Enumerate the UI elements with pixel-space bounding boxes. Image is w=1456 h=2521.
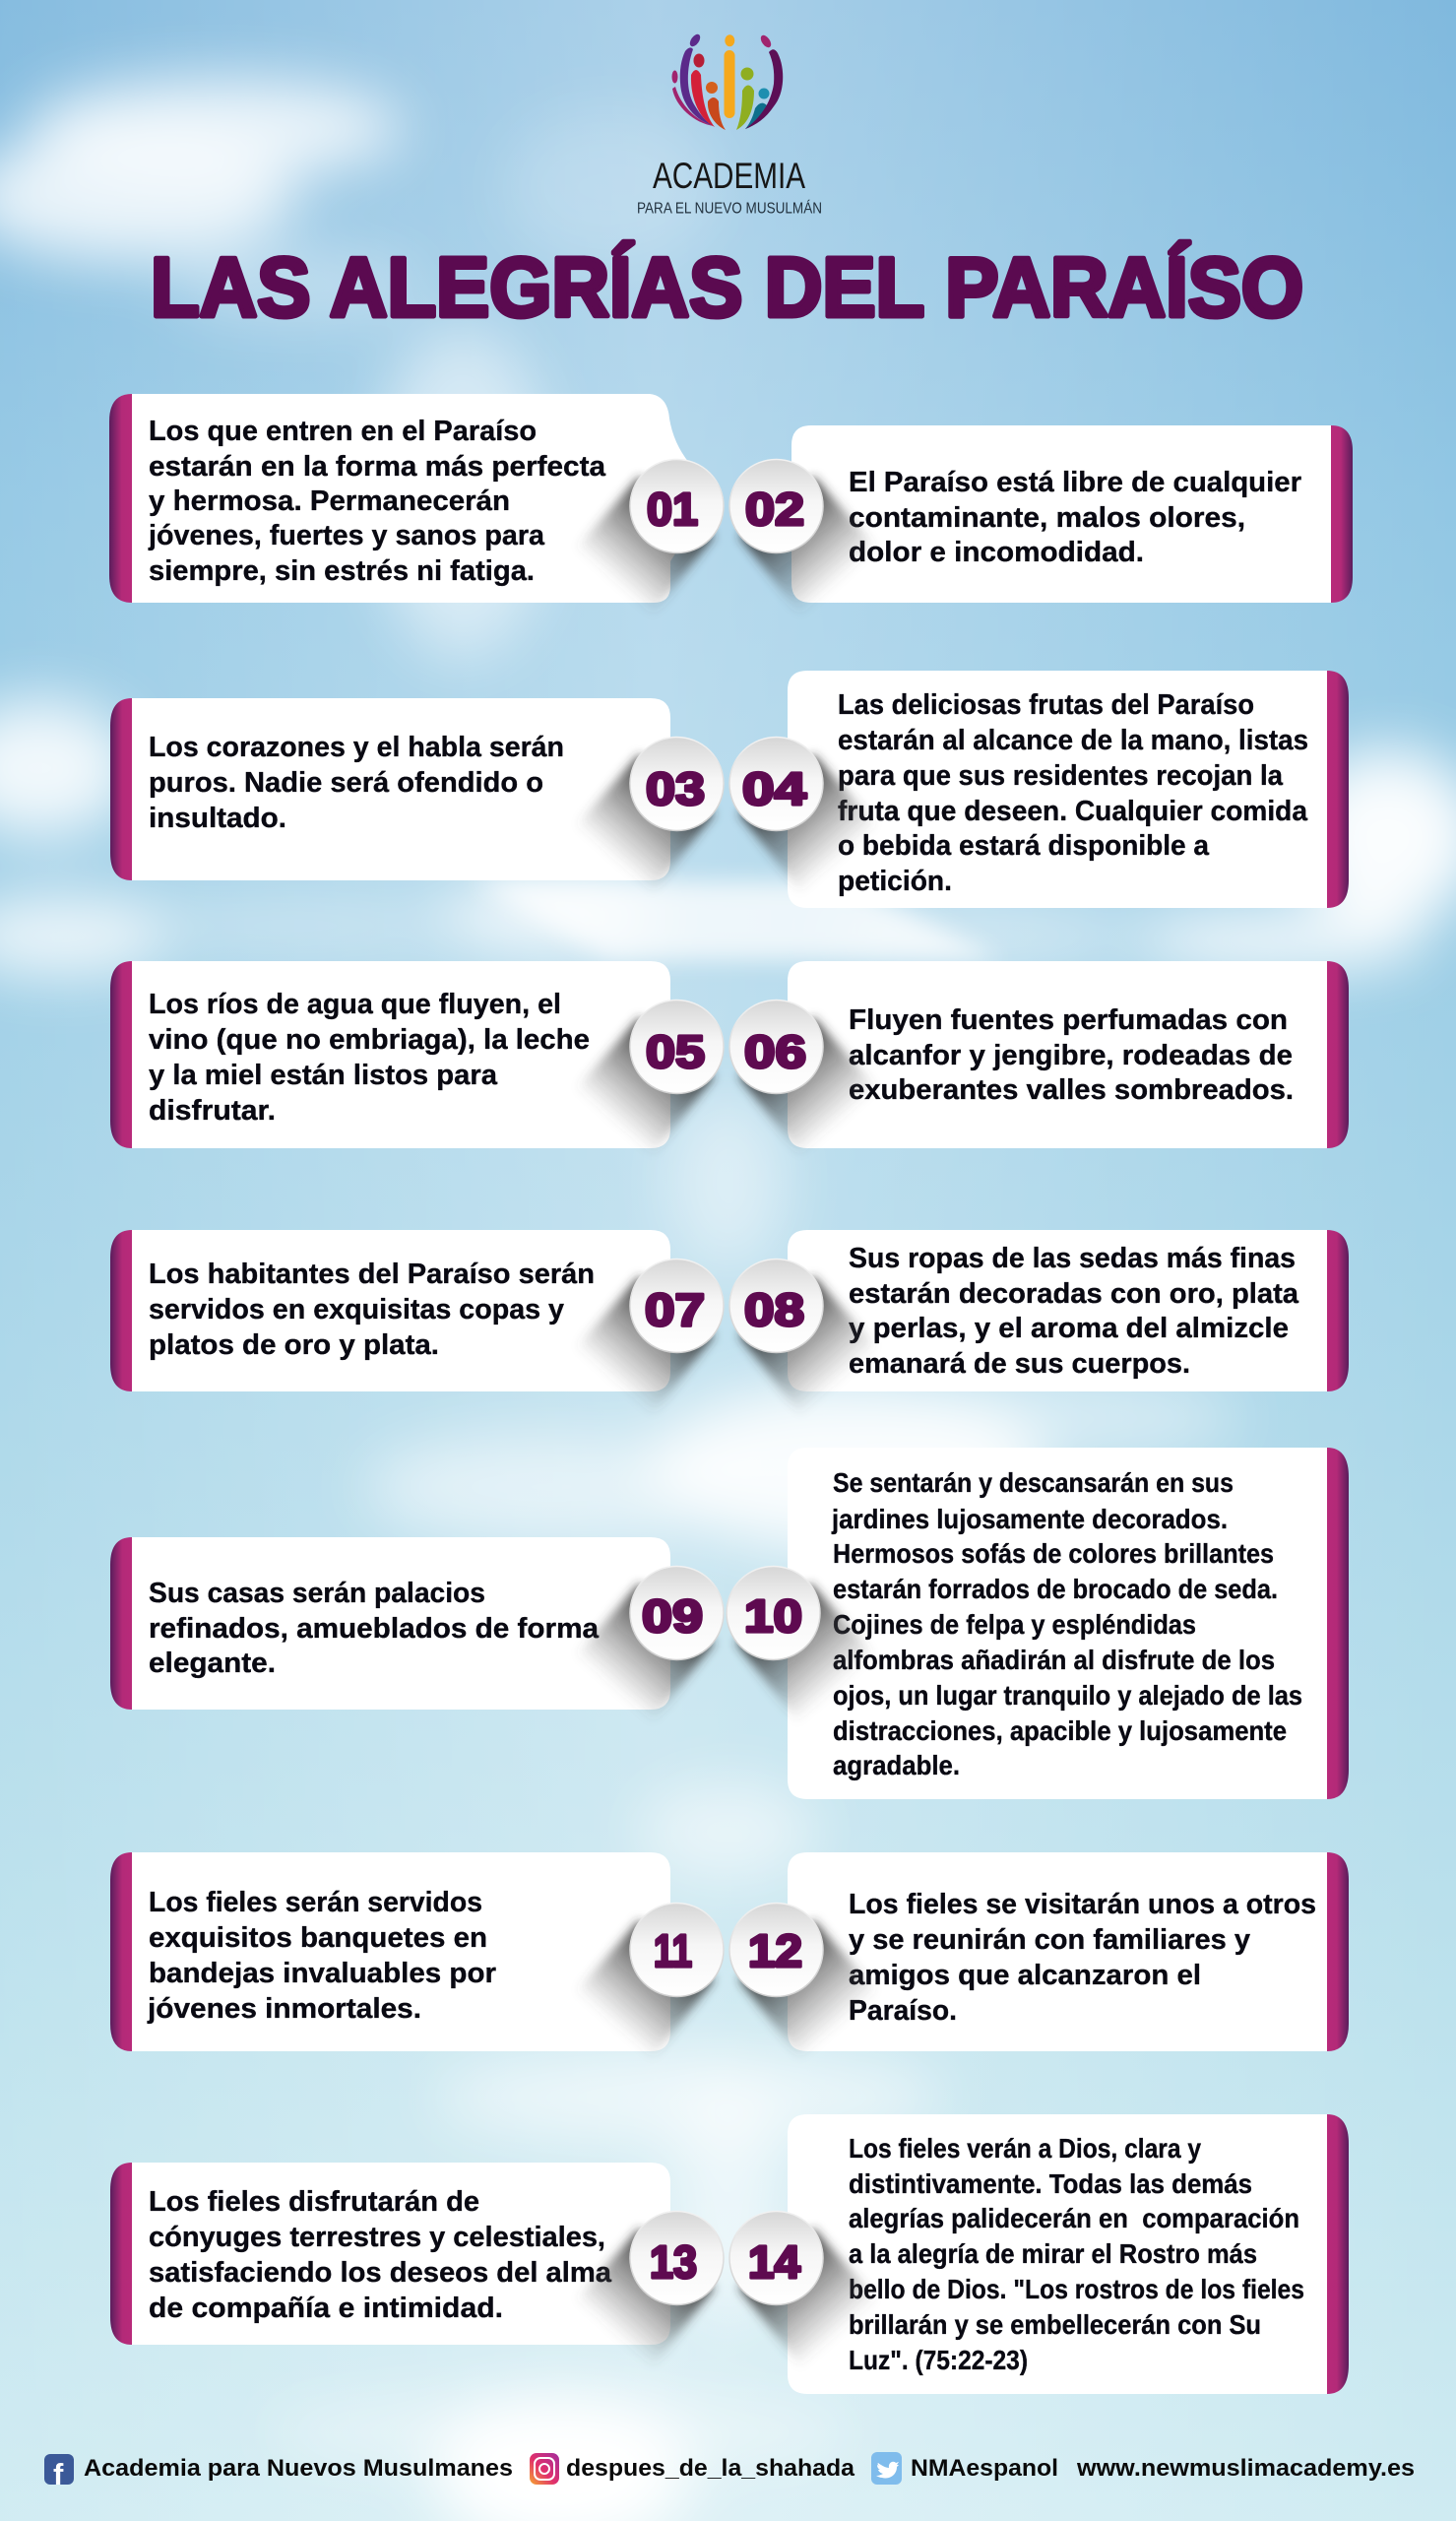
text 10: ojos, un lugar tranquilo y alejado de las bbox=[833, 1680, 1302, 1711]
text 07: Los habitantes del Paraíso serán bbox=[149, 1259, 595, 1290]
text 14: Luz". (75:22-23) bbox=[849, 2345, 1028, 2375]
badge 13 bbox=[575, 2212, 724, 2368]
text 04: Las deliciosas frutas del Paraíso bbox=[838, 689, 1254, 721]
text 08: Sus ropas de las sedas más finas bbox=[849, 1243, 1296, 1274]
text 14: Los fieles verán a Dios, clara y bbox=[849, 2133, 1201, 2164]
text 07 bbox=[149, 1259, 595, 1361]
text 07: platos de oro y plata. bbox=[149, 1329, 439, 1361]
text 10: Cojines de felpa y espléndidas bbox=[833, 1609, 1196, 1640]
badge 10 bbox=[727, 1566, 876, 1723]
logo icon: figures in a circle bbox=[671, 32, 783, 130]
text 13 bbox=[149, 2186, 612, 2324]
icon: facebook: f bbox=[53, 2457, 64, 2491]
text 10: agradable. bbox=[833, 1750, 960, 1780]
panel: card 05 bbox=[110, 961, 670, 1148]
panel: card 03 bbox=[110, 698, 670, 880]
text 06: Fluyen fuentes perfumadas con bbox=[849, 1004, 1288, 1036]
badge 14: 14 bbox=[748, 2236, 800, 2288]
text 01: y hermosa. Permanecerán bbox=[149, 485, 510, 517]
text 11: bandejas invaluables por bbox=[149, 1958, 496, 1989]
badge 06: 06 bbox=[744, 1026, 806, 1077]
badge 05: 05 bbox=[646, 1026, 705, 1077]
text 05: vino (que no embriaga), la leche bbox=[149, 1024, 590, 1056]
text 10: distracciones, apacible y lujosamente bbox=[833, 1715, 1287, 1746]
text 09: refinados, amueblados de forma bbox=[149, 1613, 600, 1645]
text 01: siempre, sin estrés ni fatiga. bbox=[149, 555, 535, 587]
badge 02: 02 bbox=[745, 484, 804, 535]
badge 08 bbox=[729, 1259, 878, 1416]
text 11: jóvenes inmortales. bbox=[147, 1993, 421, 2025]
badge 09 bbox=[575, 1566, 724, 1723]
text 11: Los fieles serán servidos bbox=[149, 1887, 482, 1918]
badge 04 bbox=[729, 737, 878, 894]
text 03 bbox=[149, 732, 564, 834]
panel: card 02 bbox=[791, 425, 1353, 603]
text 02: dolor e incomodidad. bbox=[849, 537, 1144, 568]
panel: card 14 bbox=[788, 2114, 1349, 2394]
text 08: estarán decoradas con oro, plata bbox=[849, 1278, 1299, 1310]
text 08 bbox=[849, 1243, 1299, 1380]
badge 12: 12 bbox=[748, 1925, 802, 1976]
badge 03 bbox=[575, 737, 724, 894]
text 09: elegante. bbox=[149, 1648, 276, 1679]
text 11: exquisitos banquetes en bbox=[149, 1922, 487, 1954]
badge 13: 13 bbox=[650, 2236, 697, 2288]
text 04 bbox=[838, 689, 1308, 897]
text 13: de compañía e intimidad. bbox=[149, 2293, 503, 2324]
text 11 bbox=[147, 1887, 496, 2025]
panel: card 06 bbox=[788, 961, 1349, 1148]
text 01: jóvenes, fuertes y sanos para bbox=[148, 520, 545, 551]
text 13: Los fieles disfrutarán de bbox=[149, 2186, 479, 2218]
text 07: servidos en exquisitas copas y bbox=[149, 1294, 564, 1325]
text 12: y se reunirán con familiares y bbox=[849, 1924, 1250, 1956]
website label: www.newmuslimacademy.es bbox=[1076, 2455, 1415, 2482]
text 04: fruta que deseen. Cualquier comida bbox=[838, 796, 1308, 827]
panel: card 11 bbox=[110, 1852, 670, 2051]
badge 01: 01 bbox=[647, 484, 698, 535]
twitter label: NMAespanol bbox=[911, 2455, 1058, 2482]
text 05 bbox=[149, 989, 590, 1127]
badge 06 bbox=[729, 1001, 878, 1157]
panel: card 12 bbox=[788, 1852, 1349, 2051]
badge 09: 09 bbox=[642, 1590, 703, 1642]
badge 07: 07 bbox=[645, 1284, 705, 1335]
panel: card 04 bbox=[788, 671, 1349, 908]
text 10: Se sentarán y descansarán en sus bbox=[833, 1467, 1234, 1498]
text 04: petición. bbox=[838, 866, 952, 897]
text 05: y la miel están listos para bbox=[149, 1060, 498, 1091]
text 09 bbox=[149, 1578, 600, 1679]
footer: social links bbox=[44, 2452, 1415, 2491]
text 10: estarán forrados de brocado de seda. bbox=[833, 1574, 1278, 1604]
panel: card 08 bbox=[788, 1230, 1349, 1391]
facebook label: Academia para Nuevos Musulmanes bbox=[84, 2455, 513, 2482]
badge 07 bbox=[575, 1259, 724, 1416]
badge 12 bbox=[729, 1903, 878, 2060]
panel: card 01 bbox=[109, 394, 689, 603]
badge 08: 08 bbox=[744, 1284, 804, 1335]
text 06 bbox=[849, 1004, 1294, 1106]
panel: card 10 bbox=[788, 1448, 1349, 1799]
icon: instagram bbox=[530, 2453, 559, 2485]
text 05: Los ríos de agua que fluyen, el bbox=[149, 989, 561, 1020]
text 12: Paraíso. bbox=[849, 1995, 957, 2027]
text 01 bbox=[148, 416, 606, 587]
icon: twitter bbox=[871, 2452, 902, 2485]
text 08: emanará de sus cuerpos. bbox=[849, 1348, 1190, 1380]
text 04: estarán al alcance de la mano, listas bbox=[838, 725, 1308, 756]
text 14 bbox=[849, 2133, 1304, 2375]
text 01: estarán en la forma más perfecta bbox=[149, 451, 606, 483]
text 01: Los que entren en el Paraíso bbox=[149, 416, 537, 447]
text 05: disfrutar. bbox=[149, 1095, 276, 1127]
text 03: puros. Nadie será ofendido o bbox=[149, 767, 543, 799]
text 14: bello de Dios. "Los rostros de los fieles bbox=[849, 2274, 1304, 2304]
badge 02 bbox=[729, 459, 878, 616]
instagram label: despues_de_la_shahada bbox=[566, 2455, 855, 2482]
text 13: satisfaciendo los deseos del alma bbox=[149, 2257, 612, 2289]
text 06: alcanfor y jengibre, rodeadas de bbox=[849, 1040, 1293, 1071]
text 10 bbox=[831, 1467, 1302, 1780]
badge 04: 04 bbox=[742, 763, 807, 814]
text 02: El Paraíso está libre de cualquier bbox=[849, 467, 1301, 498]
panel: card 09 bbox=[110, 1537, 670, 1710]
panel: card 07 bbox=[110, 1230, 670, 1391]
text 14: a la alegría de mirar el Rostro más bbox=[849, 2238, 1257, 2269]
text 08: y perlas, y el aroma del almizcle bbox=[849, 1313, 1289, 1344]
panel: card 13 bbox=[110, 2163, 670, 2345]
badge 05 bbox=[575, 1001, 724, 1157]
badge 10: 10 bbox=[744, 1590, 802, 1642]
text 10: jardines lujosamente decorados. bbox=[831, 1504, 1228, 1534]
text 02 bbox=[849, 467, 1301, 568]
text 12 bbox=[849, 1889, 1316, 2027]
badge 11: 11 bbox=[654, 1925, 692, 1976]
text 04: para que sus residentes recojan la bbox=[838, 760, 1284, 792]
text 12: amigos que alcanzaron el bbox=[849, 1960, 1201, 1991]
badge 01 bbox=[575, 459, 724, 616]
text 12: Los fieles se visitarán unos a otros bbox=[849, 1889, 1316, 1920]
text 06: exuberantes valles sombreados. bbox=[849, 1074, 1294, 1106]
badge 11 bbox=[575, 1903, 724, 2060]
text 14: alegrías palidecerán en comparación bbox=[849, 2203, 1299, 2233]
text 14: distintivamente. Todas las demás bbox=[849, 2168, 1252, 2199]
badge 14 bbox=[729, 2212, 878, 2368]
bright cloud wedge bbox=[473, 881, 1004, 960]
logo: Academia para el nuevo musulmán bbox=[637, 32, 822, 217]
badge 03: 03 bbox=[646, 763, 705, 814]
logo tagline: PARA EL NUEVO MUSULMÁN bbox=[637, 199, 822, 217]
text 14: brillarán y se embellecerán con Su bbox=[849, 2309, 1261, 2340]
text 03: insultado. bbox=[149, 803, 286, 834]
text 03: Los corazones y el habla serán bbox=[149, 732, 564, 763]
text 02: contaminante, malos olores, bbox=[849, 502, 1245, 534]
text 13: cónyuges terrestres y celestiales, bbox=[149, 2222, 605, 2253]
text 04: o bebida estará disponible a bbox=[838, 830, 1210, 862]
icon: facebook bbox=[44, 2454, 74, 2491]
text 10: Hermosos sofás de colores brillantes bbox=[833, 1538, 1274, 1569]
logo wordmark: ACADEMIA bbox=[653, 156, 805, 196]
text 10: alfombras añadirán al disfrute de los bbox=[833, 1645, 1275, 1675]
text 09: Sus casas serán palacios bbox=[149, 1578, 485, 1609]
title: LAS ALEGRÍAS DEL PARAÍSO bbox=[151, 241, 1303, 335]
